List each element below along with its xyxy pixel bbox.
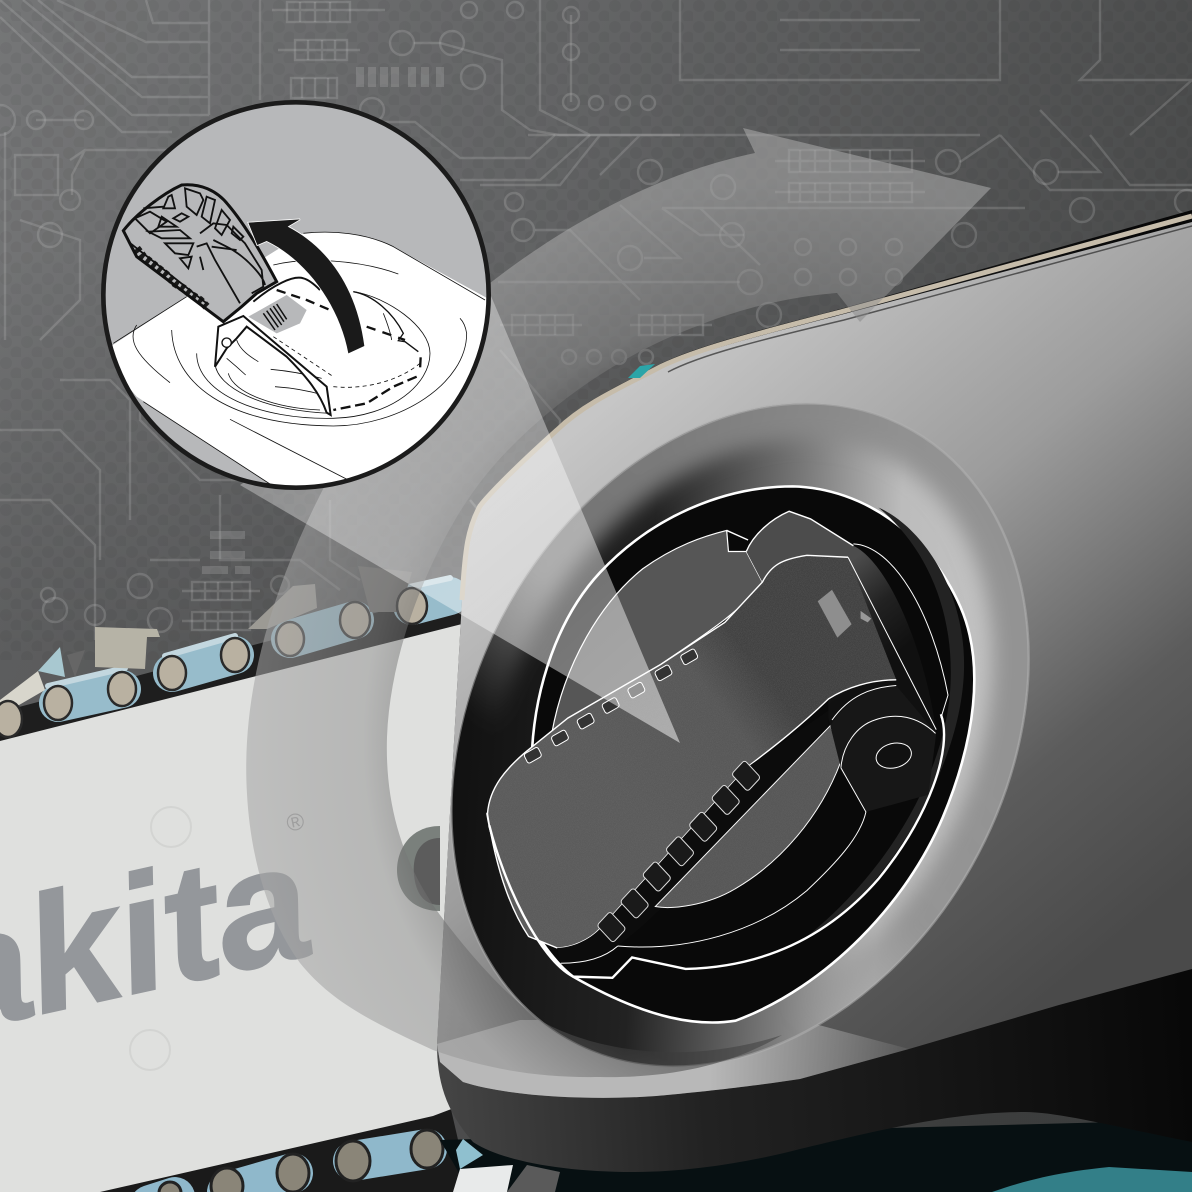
inset disc (103, 102, 489, 488)
saw body: dark base (437, 210, 1192, 1192)
light beam from inset to cap (240, 270, 680, 743)
guide bar (0, 624, 462, 1192)
hinge arm (746, 511, 936, 776)
saw chain: upper run (0, 566, 462, 752)
cover plate outlines (113, 232, 485, 488)
teal housing (992, 1167, 1192, 1192)
dashed lever outline (273, 290, 421, 410)
lever grip teeth (137, 248, 207, 307)
lever ribs (128, 188, 265, 303)
front rim line (489, 714, 944, 978)
housing lower lit strip (437, 1020, 909, 1098)
bar mounting slot (397, 826, 440, 911)
raised lever (123, 185, 277, 322)
teal accent (628, 364, 655, 378)
chain cutters (0, 566, 412, 716)
lever grain texture (487, 555, 896, 948)
hinge arm outline (727, 511, 853, 551)
cap well shading (807, 507, 964, 936)
inset rotate arrow (248, 219, 364, 353)
inner rim line (561, 544, 948, 963)
lever lower teeth (597, 760, 761, 943)
inset artwork (100, 185, 497, 497)
saw body: grey housing (437, 216, 1192, 1098)
hinge spring housing (248, 295, 307, 333)
lever top (487, 555, 896, 948)
lever upper teeth (524, 648, 698, 764)
hinge barrel outlines (832, 686, 936, 768)
registered mark: ® (284, 808, 307, 838)
lower cap grain (655, 726, 843, 907)
housing top edge (462, 216, 1192, 600)
hinge window (818, 590, 852, 638)
inset magnifier circle (100, 102, 497, 497)
cap recess: funnel (450, 403, 1030, 1067)
inset ring (103, 102, 489, 488)
lever outline (487, 555, 896, 948)
oil cap assembly (487, 486, 974, 1023)
curved direction arrow (translucent band) (246, 128, 991, 1077)
hinge strip (215, 316, 331, 415)
bar rivet marks (130, 807, 191, 1070)
hinge pin (874, 740, 914, 772)
circuit board pattern (0, 0, 1192, 640)
saw chain: lower run (90, 1105, 470, 1192)
cap well (487, 486, 974, 1023)
chain rivets (0, 588, 427, 737)
gap below lever (557, 710, 828, 964)
rear cap disc (552, 530, 762, 733)
pivot pin (222, 338, 231, 347)
lever lower jaw (618, 768, 866, 947)
hinge barrel (830, 686, 936, 812)
white cover plate (100, 232, 497, 497)
lower cap disc (655, 726, 843, 907)
